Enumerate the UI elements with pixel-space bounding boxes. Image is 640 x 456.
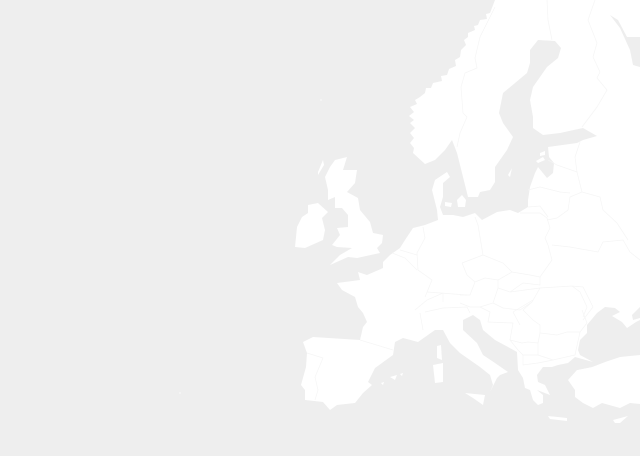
inland seas [572, 15, 640, 370]
Gotland [508, 168, 512, 177]
Madeira dot [179, 392, 181, 394]
Zealand [457, 195, 466, 207]
Great Britain [325, 157, 383, 265]
Saaremaa and Hiiumaa [536, 151, 545, 163]
mainland Europe and Scandinavia [301, 0, 640, 410]
Turkey [568, 355, 640, 408]
Corsica [437, 345, 442, 360]
Crete [548, 416, 567, 421]
country borders [307, 0, 640, 400]
White Sea [610, 15, 640, 67]
Sea of Marmara [572, 362, 605, 370]
Hebrides [318, 160, 324, 175]
Funen [445, 202, 452, 207]
land masses [295, 0, 640, 423]
Ireland [295, 203, 328, 248]
Sea of Azov [632, 307, 640, 320]
Sicily [465, 393, 485, 405]
small Atlantic islands [179, 99, 322, 394]
Cyprus [613, 416, 628, 423]
Balearic Islands [381, 373, 403, 385]
Sardinia [433, 363, 443, 383]
Rockall dot [320, 99, 322, 101]
